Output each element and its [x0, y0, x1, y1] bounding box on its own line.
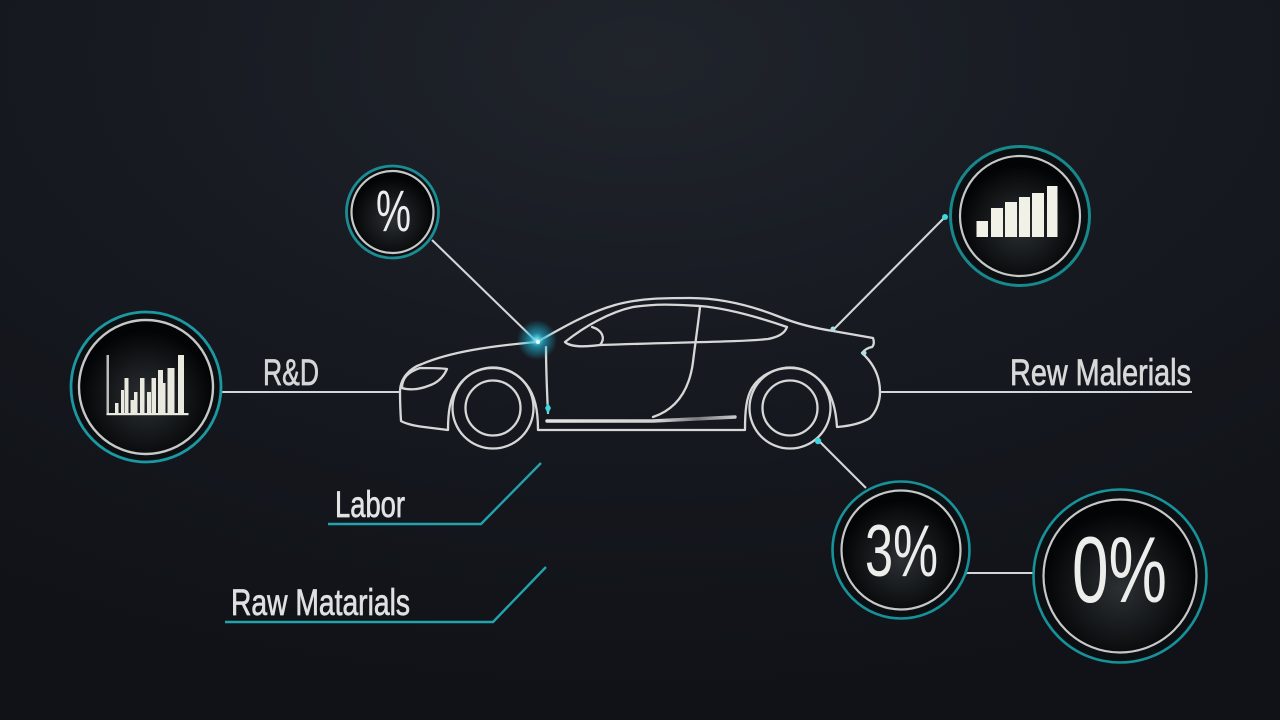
car outline: [400, 298, 880, 448]
rear door line: [653, 307, 700, 417]
front wheel: [452, 368, 534, 448]
label: lower materials with callout line: Raw Matarials: [231, 582, 410, 623]
label: right materials: Rew Malerials: [1010, 352, 1191, 393]
bar chart icon: [976, 186, 1058, 237]
label: Labor with callout line: Labor: [335, 484, 405, 525]
teal junction markers: [219, 214, 1038, 575]
badge: 0%: [1034, 490, 1206, 662]
label: lower materials with callout line: [225, 567, 546, 623]
badge: 3%: [832, 482, 970, 618]
badge: rising bars: [950, 146, 1090, 286]
connector lines to the car: [220, 217, 1192, 573]
door sill: [547, 417, 735, 421]
rear wheel: [750, 368, 830, 448]
mirror: [592, 327, 603, 345]
headlight: [402, 368, 447, 389]
car body: [400, 298, 880, 430]
glow at hood joint: [517, 320, 557, 360]
badge: percent: [346, 166, 438, 258]
value 0%: 0%: [1072, 517, 1167, 622]
badge: R&D bar chart: [71, 312, 221, 462]
front door line: [546, 347, 548, 413]
label: Labor with callout line: [328, 463, 541, 525]
windows: [565, 305, 787, 346]
label: R&D: R&D: [263, 352, 319, 393]
value 3%: 3%: [865, 511, 938, 592]
bar chart icon: [106, 355, 188, 415]
percent symbol: %: [376, 179, 411, 244]
